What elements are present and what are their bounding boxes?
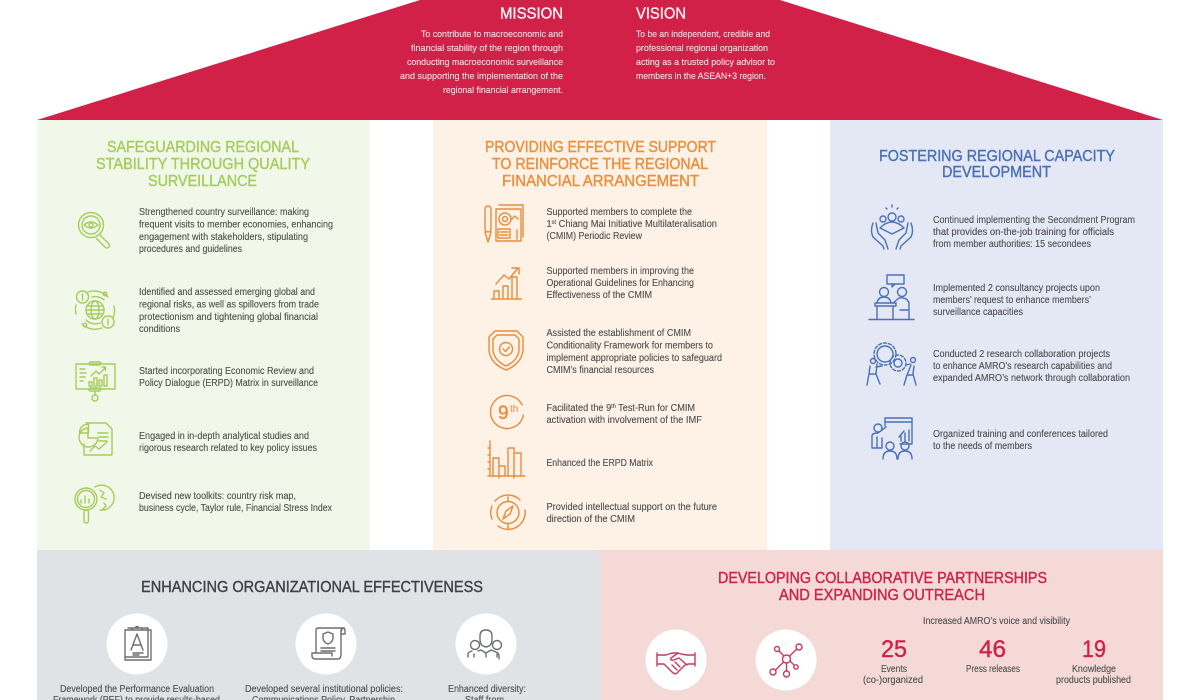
text: intellectual support: Provided intellectual support on the future xyxy=(546,502,717,513)
text: test-run: Facilitated the 9 xyxy=(546,403,617,414)
partnerships heading: AND EXPANDING OUTREACH xyxy=(779,587,985,604)
icon: diverse staff xyxy=(456,614,516,674)
text: ERPD matrix: Policy Dialogue (ERPD) Matrix in surveillance xyxy=(139,378,318,389)
icon: people turning gears xyxy=(867,343,916,385)
surveillance heading: SURVEILLANCE xyxy=(148,173,257,190)
vision text xyxy=(636,29,775,82)
panel: partnerships and outreach xyxy=(600,550,1163,700)
text: conditionality framework: Conditionality Framework for members to xyxy=(546,340,713,352)
mission text: conducting macroeconomic surveillance xyxy=(407,57,563,68)
stat: events xyxy=(863,636,923,686)
capacity development heading xyxy=(879,148,1115,181)
icon: review document and pen xyxy=(485,205,523,242)
text: performance evaluation xyxy=(53,684,220,700)
text: consultancy projects: members’ request to enhance members’ xyxy=(933,295,1091,306)
text: performance evaluation: Developed the Performance Evaluation xyxy=(60,684,214,695)
text: secondment: from member authorities: 15 secondees xyxy=(933,239,1091,250)
text: research collaboration: Conducted 2 research collaboration projects xyxy=(933,349,1110,360)
text: analytical studies xyxy=(139,431,317,454)
icon: 9th badge: 9 xyxy=(498,403,509,424)
stat: press releases: Press releases xyxy=(966,664,1020,675)
icon: evaluation clipboard xyxy=(106,614,168,674)
surveillance heading: STABILITY THROUGH QUALITY xyxy=(96,156,310,173)
stat: knowledge products: Knowledge xyxy=(1072,664,1116,675)
vision text: To be an independent, credible and xyxy=(636,29,770,40)
text: emerging risks: regional risks, as well as spillovers from trade xyxy=(139,300,319,310)
text: country surveillance: frequent visits to member economies, enhancing xyxy=(139,220,333,230)
vision text: professional regional organization xyxy=(636,43,768,54)
icon: magnifier with eye xyxy=(78,212,110,248)
text: periodic review: (CMIM) Periodic Review xyxy=(546,231,643,242)
text: test-run: activation with involvement of the IMF xyxy=(546,415,702,426)
icon: globe with currency xyxy=(75,291,115,329)
text: emerging risks: protectionism and tightening global financial xyxy=(139,312,318,323)
text: country surveillance: Strengthened country surveillance: making xyxy=(139,207,309,218)
stat: knowledge products xyxy=(1056,636,1131,686)
panel: surveillance xyxy=(37,120,370,550)
vision heading: VISION xyxy=(636,6,686,22)
icon: shield with check xyxy=(489,331,523,370)
text: enhanced diversity: Enhanced diversity: xyxy=(448,684,526,695)
text: training and conferences: Organized training and conferences tailored xyxy=(933,429,1108,440)
icon: rising bar chart xyxy=(492,268,522,299)
text: ERPD matrix: Started incorporating Economic Review and xyxy=(139,366,314,377)
text: conditionality framework xyxy=(546,328,722,376)
text: country surveillance: engagement with stakeholders, stipulating xyxy=(139,232,308,243)
surveillance heading xyxy=(96,139,310,190)
text: intellectual support: direction of the CMIM xyxy=(546,514,635,525)
panel: regional financial arrangement xyxy=(433,120,767,550)
stat: knowledge products: products published xyxy=(1056,675,1131,686)
text: conditionality framework: Assisted the establishment of CMIM xyxy=(546,328,691,339)
icon: bar chart xyxy=(488,441,525,478)
text: emerging risks: Identified and assessed emerging global and xyxy=(139,287,315,298)
text: research collaboration: expanded AMRO’s network through collaboration xyxy=(933,373,1130,384)
icon: training presentation xyxy=(872,418,912,459)
text: periodic review xyxy=(546,207,717,242)
vision text: acting as a trusted policy advisor to xyxy=(636,57,775,68)
roof: mission and vision xyxy=(37,0,1163,120)
text: consultancy projects: surveillance capacities xyxy=(933,307,1023,318)
icon: network xyxy=(756,630,816,690)
text: consultancy projects: Implemented 2 consultancy projects upon xyxy=(933,283,1100,294)
financial arrangement heading xyxy=(485,139,716,190)
text: conditionality framework: CMIM’s financial resources xyxy=(546,365,654,376)
text: operational guidelines: Supported members in improving the xyxy=(546,266,694,277)
text: enhanced diversity xyxy=(448,684,526,700)
text: secondment xyxy=(933,215,1135,250)
icon: consultancy meeting xyxy=(869,275,914,320)
text: secondment: Continued implementing the Secondment Program xyxy=(933,215,1135,226)
stat: press releases xyxy=(966,636,1020,675)
financial arrangement heading: TO REINFORCE THE REGIONAL xyxy=(492,156,708,173)
stat: press releases: 46 xyxy=(979,636,1006,663)
icon: 9th badge xyxy=(491,396,523,429)
icon: report with pie chart xyxy=(79,423,112,455)
text: operational guidelines: Operational Guidelines for Enhancing xyxy=(546,278,694,289)
text: voice and visibility: Increased AMRO’s voice and visibility xyxy=(923,616,1070,627)
text: test-run: Test-Run for CMIM xyxy=(616,403,695,414)
stat: events: 25 xyxy=(881,636,907,663)
vision text: members in the ASEAN+3 region. xyxy=(636,71,766,82)
partnerships heading xyxy=(718,570,1047,604)
text: conditionality framework: implement appropriate policies to safeguard xyxy=(546,353,722,364)
text: intellectual support xyxy=(546,502,717,525)
text: analytical studies: rigorous research related to key policy issues xyxy=(139,443,317,454)
text: new toolkits: business cycle, Taylor rule, Financial Stress Index xyxy=(139,503,332,514)
text: periodic review: Chiang Mai Initiative Multilateralisation xyxy=(556,219,717,230)
text: institutional policies xyxy=(245,684,403,700)
icon: hands holding people xyxy=(872,205,912,249)
icon: 9th badge: th xyxy=(510,404,518,415)
text: emerging risks xyxy=(139,287,319,335)
mission text: regional financial arrangement. xyxy=(443,85,563,96)
text: consultancy projects xyxy=(933,283,1100,318)
stat: knowledge products: 19 xyxy=(1082,636,1106,663)
text: enhanced matrix: Enhanced the ERPD Matrix xyxy=(546,458,653,469)
capacity development heading: FOSTERING REGIONAL CAPACITY xyxy=(879,148,1115,165)
icon: presentation board xyxy=(76,362,115,401)
text: periodic review: 1 xyxy=(546,219,552,230)
icon: handshake xyxy=(646,630,706,690)
icon: magnifier over globe xyxy=(75,485,114,523)
financial arrangement heading: FINANCIAL ARRANGEMENT xyxy=(502,173,699,190)
text: operational guidelines: Effectiveness of the CMIM xyxy=(546,290,652,301)
text: analytical studies: Engaged in in-depth analytical studies and xyxy=(139,431,309,442)
icon: policy scroll xyxy=(296,614,356,674)
surveillance heading: SAFEGUARDING REGIONAL xyxy=(107,139,299,156)
text: institutional policies: Developed several institutional policies: xyxy=(245,684,403,695)
mission text xyxy=(400,29,563,96)
text: training and conferences: to the needs of members xyxy=(933,441,1032,452)
text: test-run: th xyxy=(611,404,616,410)
text: training and conferences xyxy=(933,429,1108,452)
text: new toolkits: Devised new toolkits: country risk map, xyxy=(139,491,296,502)
mission heading: MISSION xyxy=(500,6,563,22)
mission text: financial stability of the region through xyxy=(411,43,563,54)
text: secondment: that provides on-the-job training for officials xyxy=(933,227,1114,238)
mission text: and supporting the implementation of the xyxy=(400,71,563,82)
panel: organizational effectiveness xyxy=(37,550,600,700)
text: research collaboration: to enhance AMRO’s research capabilities and xyxy=(933,361,1112,372)
text: periodic review: st xyxy=(552,220,556,226)
financial arrangement heading: PROVIDING EFFECTIVE SUPPORT xyxy=(485,139,716,156)
text: test-run xyxy=(546,403,702,426)
partnerships heading: DEVELOPING COLLABORATIVE PARTNERSHIPS xyxy=(718,570,1047,587)
text: ERPD matrix xyxy=(139,366,318,389)
stat: events: (co-)organized xyxy=(863,675,923,686)
icon: compass xyxy=(491,495,525,529)
capacity development heading: DEVELOPMENT xyxy=(942,164,1051,181)
panel: capacity development xyxy=(830,120,1163,550)
text: country surveillance xyxy=(139,207,333,255)
text: research collaboration xyxy=(933,349,1130,384)
text: emerging risks: conditions xyxy=(139,324,180,335)
organizational effectiveness heading: ENHANCING ORGANIZATIONAL EFFECTIVENESS xyxy=(141,579,483,596)
text: new toolkits xyxy=(139,491,332,514)
text: country surveillance: procedures and guidelines xyxy=(139,244,242,255)
mission text: To contribute to macroeconomic and xyxy=(421,29,563,40)
stat: events: Events xyxy=(881,664,907,675)
text: operational guidelines xyxy=(546,266,694,301)
text: periodic review: Supported members to complete the xyxy=(546,207,692,218)
